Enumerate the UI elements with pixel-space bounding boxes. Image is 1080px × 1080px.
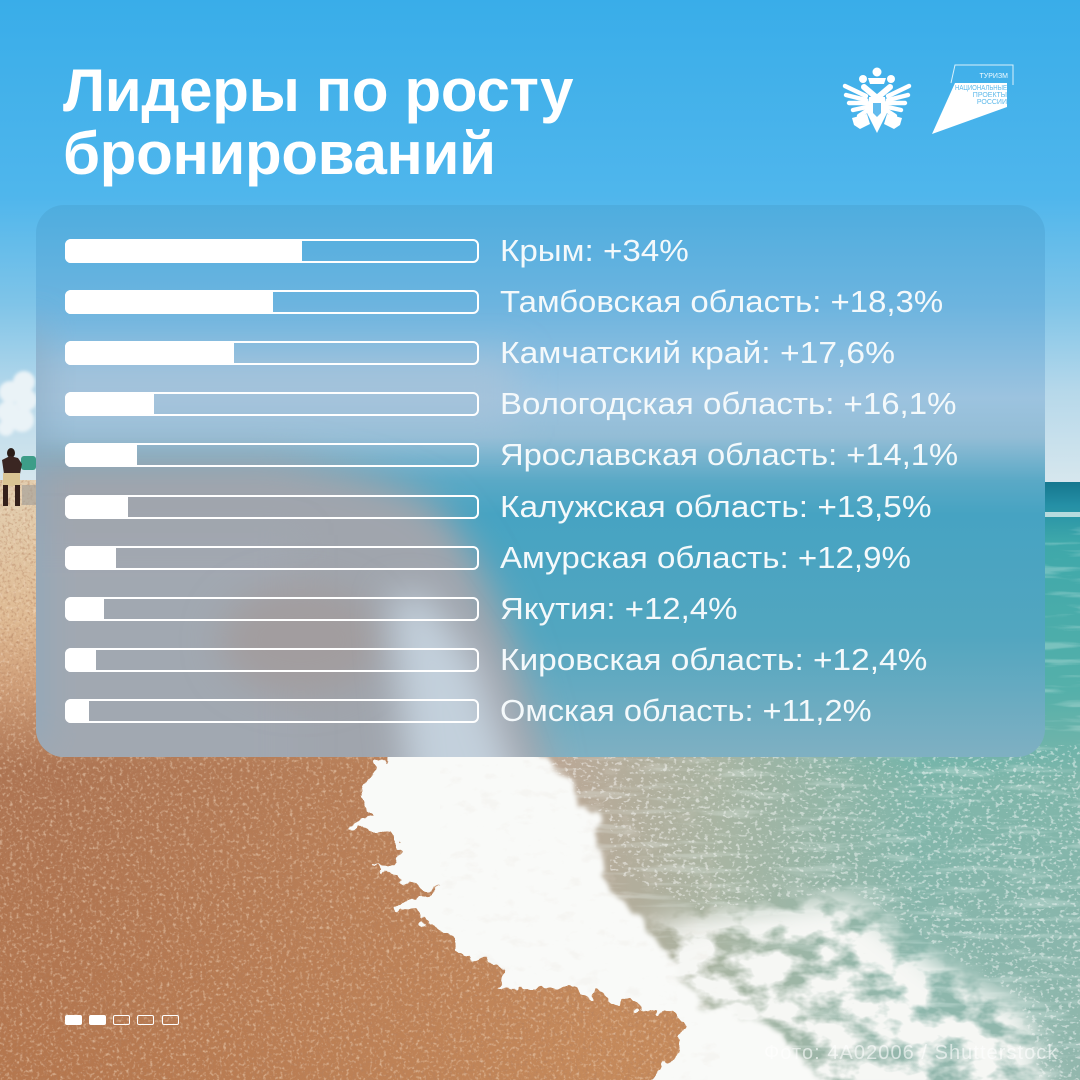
title: бронирований bbox=[63, 120, 496, 187]
title: Лидеры по росту bbox=[63, 57, 573, 124]
icon: state emblem eagle bbox=[842, 68, 912, 133]
left wing feathers bbox=[845, 86, 868, 116]
logo outline bbox=[951, 65, 1013, 85]
loose foam bbox=[620, 895, 1050, 1080]
row: Ярославская область: Ярославская область: +14,1% bbox=[500, 437, 958, 472]
pagination dots bbox=[65, 1015, 179, 1025]
crowns bbox=[859, 68, 895, 84]
water sparkles bbox=[520, 745, 1080, 1080]
panel: booking growth leaders bbox=[36, 205, 1045, 757]
logo text: НАЦИОНАЛЬНЫЕ bbox=[955, 85, 1007, 92]
logo text: РОССИИ bbox=[977, 99, 1007, 106]
row: Якутия bbox=[65, 591, 737, 626]
row: Якутия: Якутия: +12,4% bbox=[500, 591, 737, 626]
row: Калужская область bbox=[65, 489, 932, 524]
row: Кировская область bbox=[65, 642, 927, 677]
row: Камчатский край bbox=[65, 335, 895, 370]
person on beach bbox=[2, 448, 36, 506]
heads and neck bbox=[864, 87, 890, 98]
row: Кировская область: Кировская область: +12,4% bbox=[500, 642, 927, 677]
logo text: ПРОЕКТЫ bbox=[973, 92, 1007, 99]
row: Ярославская область bbox=[65, 437, 958, 472]
row: Амурская область: Амурская область: +12,9% bbox=[500, 540, 911, 575]
shield bbox=[873, 103, 881, 117]
clouds bbox=[0, 371, 37, 436]
row: Омская область bbox=[65, 693, 872, 728]
right wing feathers bbox=[886, 86, 909, 116]
sky bbox=[0, 0, 1080, 490]
logo text: ТУРИЗМ bbox=[980, 73, 1008, 80]
logo white shape bbox=[932, 83, 1007, 134]
row: Амурская область bbox=[65, 540, 911, 575]
photo credit: Фото: 4A02006 / Shutterstock bbox=[764, 1042, 1058, 1064]
row: Вологодская область: Вологодская область: +16,1% bbox=[500, 386, 956, 421]
shallow sandy water bbox=[520, 757, 1080, 1080]
frosted panel background bbox=[36, 205, 1045, 757]
row: Калужская область: Калужская область: +13,5% bbox=[500, 489, 932, 524]
sand bbox=[0, 480, 720, 1080]
row: Камчатский край: Камчатский край: +17,6% bbox=[500, 335, 895, 370]
logo: national projects tourism bbox=[932, 64, 1014, 134]
row: Крым: Крым: +34% bbox=[500, 233, 689, 268]
dense foam bbox=[320, 740, 850, 1080]
sea bbox=[0, 482, 1080, 1080]
logo text bbox=[955, 73, 1008, 106]
foam shading bbox=[440, 760, 720, 1080]
body bbox=[867, 97, 887, 133]
title bbox=[63, 57, 574, 187]
legs bbox=[852, 114, 902, 129]
row: Вологодская область bbox=[65, 386, 956, 421]
row: Омская область: Омская область: +11,2% bbox=[500, 693, 872, 728]
row: Крым bbox=[65, 233, 689, 268]
row: Тамбовская область bbox=[65, 284, 943, 319]
wave streaks bbox=[0, 520, 1080, 1080]
horizon foam line bbox=[1045, 512, 1080, 517]
row: Тамбовская область: Тамбовская область: +18,3% bbox=[500, 284, 943, 319]
